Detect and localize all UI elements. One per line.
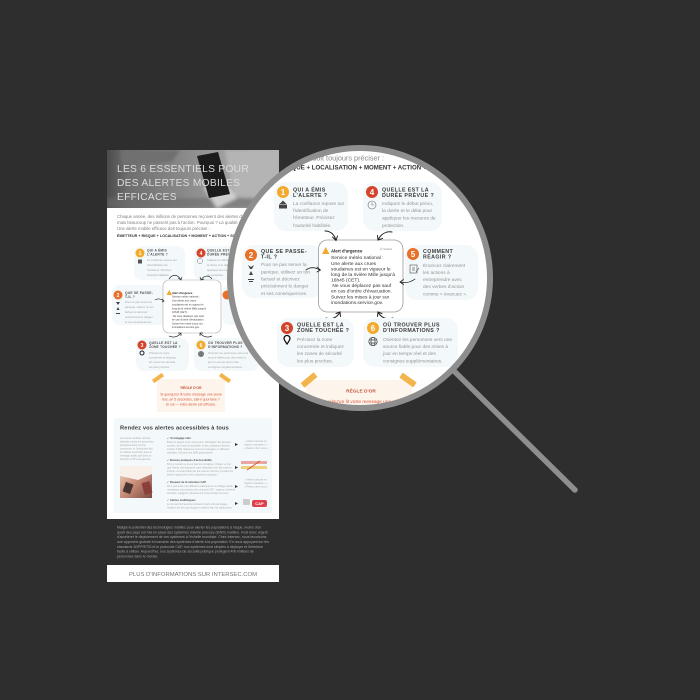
panel intro: message public que dans la [120,454,152,458]
card 3: Précisez la zone [297,337,333,343]
item: multilingual alerts [167,498,232,510]
card 4: QUELLE EST LA [382,188,429,194]
card 4: appliquer les mesures de [382,216,436,222]
card 5 [405,245,478,300]
item: clear language: Limitez à 360 caractères pour les messages en diffusion [167,448,230,451]
card 4 small: DURÉE PRÉVUE ? [207,252,239,256]
central alert message: Une alerte aux crues [331,261,377,267]
card 4 small: QUELLE EST LA [207,248,236,252]
golden rule: Si oui — votre alerte est efficace. [166,402,216,406]
card 2: factuel et décrivez [261,276,300,282]
central alert message: Suivez les mises à jour sur [331,294,390,300]
panel intro: structure CAP sous-jacente. [120,458,151,461]
icon: globe [369,337,377,346]
card 4: 4 [370,188,375,197]
example: CAP badge [243,499,267,507]
item: clear language: Évitez le jargon et les acronymes. Privilégiez des phrases [167,441,232,444]
infographic page [107,150,280,519]
card 3 small: les zones de sécurité [149,360,176,364]
card 4 [363,182,442,231]
central alert message: Alert d'urgence [331,248,363,254]
card 5: entreprendre avec [423,277,463,283]
card 4 small: Indiquez le début prévu, [207,258,237,262]
card 5: les actions à [423,270,450,276]
card 3: les zones de sécurité [297,351,342,357]
card 3: ZONE TOUCHÉE ? [297,326,349,334]
closing paragraph: personnes dans le monde. [117,554,158,558]
card 2: T-IL ? [261,254,277,260]
photo: hands holding phones [120,466,152,498]
closing paragraph: une approche globale et humaine des systèmes d'alerte à la population. En nous appuyant sur les [117,540,269,544]
icon: warning [322,247,329,254]
card 1: l'autorité habilitée. [293,223,332,229]
example: capitalised text crossed out [241,461,267,470]
alert message small: Ne vous déplacez pas sauf [172,314,204,318]
card 6: D'INFORMATIONS ? [383,328,440,334]
card 6 small: Orientez les personnes vers une [208,351,249,355]
card 2 small: panique, utilisez un ton [125,305,154,309]
golden rule [152,373,231,412]
magnified intro text [294,155,425,171]
alert message small [163,280,221,333]
card 5: Énoncez clairement [423,262,466,269]
card 2: Pour ne pas semer la [261,262,307,268]
card 1 small [134,246,185,280]
card 1: l'émetteur. Précisez [293,215,335,221]
card 1: l'identification de [293,208,329,214]
card 4 small: 4 [200,251,203,257]
item: CAP structure: Pour permettre une diffusion multicanal et un ciblage précis, [167,485,234,488]
golden rule: Si quelqu'un lit votre message une seule [160,392,222,396]
card 2: panique, utilisez un ton [261,270,310,276]
footer link bar: PLUS D'INFORMATIONS SUR INTERSEC.COM [129,572,257,578]
intro text: mais beaucoup ne passent pas à l'action. Pourquoi ? La qualité du message. [117,220,263,225]
item: CAP structure: ✓ Respect de la structure CAP [167,480,206,484]
icons: hazards [248,265,254,282]
card 6 small: D'INFORMATIONS ? [208,345,243,349]
card 1 small: 1 [139,251,142,257]
card 4: la durée et le délai pour [382,208,433,214]
magnified golden rule [300,372,417,405]
card 1: La confiance repose sur [293,201,345,207]
title: EFFICACES [117,192,177,203]
alert message small: Suivez les mises à jour sur [172,322,203,326]
arrows to examples [235,443,238,505]
magnifier lens [226,141,490,420]
central alert message: Service météo national : [331,255,383,261]
central alert message [318,240,403,312]
alert message small: Service météo national : [172,294,200,298]
card 6: OÙ TROUVER PLUS [383,322,440,329]
card 4 small: de protection. [207,273,224,277]
card 4: protection. [382,223,404,229]
intro text [117,214,280,238]
icon: clock [368,201,376,209]
magnifier handle [453,370,575,490]
card 3 small: ZONE TOUCHÉE ? [149,344,181,349]
panel intro: concernée, et l'inclusivité doit [120,448,153,450]
card 6 [363,318,458,367]
item: clear language: ✓ Un langage clair [167,436,191,440]
card 5: 5 [411,250,416,259]
closing paragraph: standards 3GPP/ETSI et le protocole CAP, nos systèmes sont simples à déployer et l'interface [117,545,263,549]
card 2 small: précisément le danger [125,315,153,319]
central alert message: À l'instant [380,247,392,251]
alert message small: 16h45 (CET). [172,310,188,314]
example quotes: « Alerte canicule en [245,440,268,443]
item: accessibility: ✓ Bonnes pratiques d'accessibilité [167,458,212,462]
card 6 small: OÙ TROUVER PLUS [208,340,243,345]
card 3: QUELLE EST LA [297,323,344,329]
footer link bar [107,565,279,582]
lens ring [230,148,490,408]
closing paragraph: Malgré le potentiel des technologies mobiles pour alerter les populations à risque, moins d'un [117,526,261,530]
card 1: 1 [281,188,286,197]
alert message small: Une alerte aux crues [172,298,197,302]
card 2: et ses conséquences. [261,291,307,297]
panel intro: se refléter aussi bien dans le [120,451,152,454]
card 2 small: et ses conséquences. [125,320,152,324]
intro text: Une alerte mobile efficace doit toujours préciser : [117,226,210,231]
title [117,164,249,203]
card 2 small: QUE SE PASSE- [125,291,153,295]
card 1 [274,182,348,231]
card 6: source fiable pour des mises à [383,344,448,350]
card 2: 2 [249,251,254,260]
item: multilingual alerts: Le format CAP autorise plusieurs blocs info par langue. [167,503,228,506]
card 2: QUE SE PASSE- [261,249,307,255]
item: multilingual alerts: ✓ Alertes multilingues [167,498,196,502]
closing paragraph [117,526,269,558]
card 3: 3 [285,324,290,333]
card 1: L'ALERTE ? [293,193,327,199]
item: accessibility [167,458,234,476]
card 3 [277,318,354,367]
alert message small: soudaines est en vigueur le [172,302,204,306]
alert message small: long de la rivière Mille jusqu'à [172,306,207,310]
item: CAP structure: renseignez correctement les champs CAP : urgence, sévérité, [167,488,236,492]
example quotes: « Alerte canicule en [245,478,268,482]
card 1 small: QUI A ÉMIS [147,248,167,252]
card 6 small: source fiable pour des mises à [208,356,246,360]
item: accessibility: inclinez un texte lisible par les lecteurs d'écran, et évitez les [167,470,234,473]
card 5: des verbes d'action [423,284,465,290]
card 2: précisément le danger [261,284,309,290]
example quotes: « Restez chez vous » [244,486,269,488]
alert message small: Alert d'urgence [172,291,193,295]
golden rule: fois, en 5 secondes, sait-il quoi faire ? [162,398,220,402]
title: LES 6 ESSENTIELS POUR [117,164,249,175]
example quotes: régions suivantes » ≠ [244,482,268,485]
card 6 small: 6 [200,343,203,349]
arrows to alert [306,231,415,319]
card 6: 6 [371,324,376,333]
magnified intro text: ÉMETTEUR + RISQUE + LOCALISATION + MOMENT + ACTION + SOURCE [241,164,454,172]
item: clear language: courtes, des mots du quotidien et des consignes directes. [167,444,231,448]
golden rule: RÈGLE D'OR [181,385,202,390]
card 3 small [136,338,189,371]
card 6 small: jour en temps réel et des [207,360,239,364]
card 2 small: T-IL ? [125,295,135,299]
card 5: COMMENT [423,249,454,255]
card 4: Indiquez le début prévu, [382,201,433,207]
card 4 small [194,246,246,280]
example quotes: « Restez chez vous » [244,447,269,450]
panel intro [120,437,154,461]
panel intro: Les alertes mobiles doivent [120,437,151,440]
card 2 small: Pour ne pas semer la [125,300,152,304]
closing paragraph: quart des pays ont mis en place des systèmes d'alerte précoce (EWS) mobiles. Il est donc urgent [117,530,268,534]
alert message small: en cas d'ordre d'évacuation. [172,318,205,322]
card 1: QUI A ÉMIS [293,186,326,194]
intro text: Chaque année, des millions de personnes reçoivent des alertes d'urgence sur mobile, [117,214,280,219]
card 3 small: les plus proches. [149,365,170,369]
panel heading: Rendez vos alertes accessibles à tous [120,426,229,432]
arrows small [155,275,212,337]
example quotes [244,440,269,488]
card 2 small: 2 [117,293,120,299]
central alert message: long de la rivière Mille jusqu'à [331,272,395,278]
card 3 small: 3 [141,343,144,349]
card 4: DURÉE PRÉVUE ? [382,191,434,199]
item: CAP structure: certitude, catégorie d'événement et description de zone. [167,492,229,495]
icon: institution [279,200,287,208]
card 4 small: la durée et le délai pour [207,263,236,267]
card 4 small: appliquer les mesures [207,268,235,272]
card 6: jour en temps réel et des [382,351,436,357]
icon: map pin [284,336,290,344]
card 5 small [222,285,242,325]
card 5: RÉAGIR ? [423,252,452,260]
card 1 small: l'émetteur. Précisez [147,268,172,272]
card 3 small: QUELLE EST LA [149,341,178,345]
card 3 small: Précisez la zone [149,351,170,355]
example quotes: régions suivantes » ≠ [244,444,268,446]
accessibility panel [114,418,272,513]
card 6: consignes supplémentaires. [383,358,442,364]
title: DES ALERTES MOBILES [117,178,240,189]
card 2 small: factuel et décrivez [125,310,148,314]
item: clear language: cellulaire, 160 pour les SMS géolocalisés. [167,452,214,454]
card 1 small: l'identification de [147,263,168,267]
magnified intro text: mais beaucoup ne passent pas à l'action. Pourquoi ? [226,141,397,150]
item: clear language [167,436,232,454]
card 1 small: L'ALERTE ? [147,252,168,256]
item: accessibility: Tout le monde ne prend pas les consignes. Utilisez un ton [167,463,232,466]
panel intro: présentes dans la zone [120,444,146,447]
card 2 [242,245,322,298]
card 3: les plus proches. [297,358,333,364]
header banner [107,150,279,208]
closing paragraph: facile à utiliser. Aujourd'hui, nos systèmes de sécurité publique protègent 400 millions de [117,550,254,554]
central alert message: Ne vous déplacez pas sauf [331,283,392,289]
item: CAP structure [167,480,236,495]
item: accessibility: lettres majuscules et les caractères spéciaux. [167,474,218,476]
card 1 small: l'autorité habilitée. [147,273,170,277]
card 5: comme « évacuez ». [423,292,467,298]
intro text: ÉMETTEUR + RISQUE + LOCALISATION + MOMENT + ACTION + SOURCE [117,233,247,238]
card 1 small: La confiance repose sur [147,258,177,262]
closing paragraph: d'accélérer le déploiement de ces systèmes à l'échelle mondiale. Chez Intersec, nous favorisons [117,535,267,539]
card 6: Orientez les personnes vers une [383,337,452,343]
card 6 small: consignes supplémentaires. [208,365,243,369]
item: multilingual alerts: Intégrez-les dès que langue et validez-bien les traductions. [167,506,232,510]
magnified intro text: Une alerte mobile efficace doit toujours préciser : [226,154,384,162]
alert message small: inondations.service.gov. [172,325,200,329]
card 3: concernée et indiquez [297,344,345,350]
card 3 small: concernée et indiquez [149,356,177,360]
card 6 small [194,338,259,371]
central alert message: inondations.service.gov. [331,300,383,306]
item: accessibility: que l'alerte soit autonome sans dépendre d'un lien externe, [167,466,233,470]
panel intro: atteindre toutes les personnes [120,440,154,444]
icon: checklist [410,265,419,273]
magnified golden rule: RÈGLE D'OR [346,386,376,394]
magnified golden rule: Si quelqu'un lit votre message une seule [318,399,404,405]
central alert message: en cas d'ordre d'évacuation. [331,289,392,295]
example: CAP badge: CAP [255,501,264,506]
card 2 small [112,285,168,325]
central alert message: 16h45 (CET). [331,277,360,283]
central alert message: soudaines est en vigueur le [331,266,391,272]
